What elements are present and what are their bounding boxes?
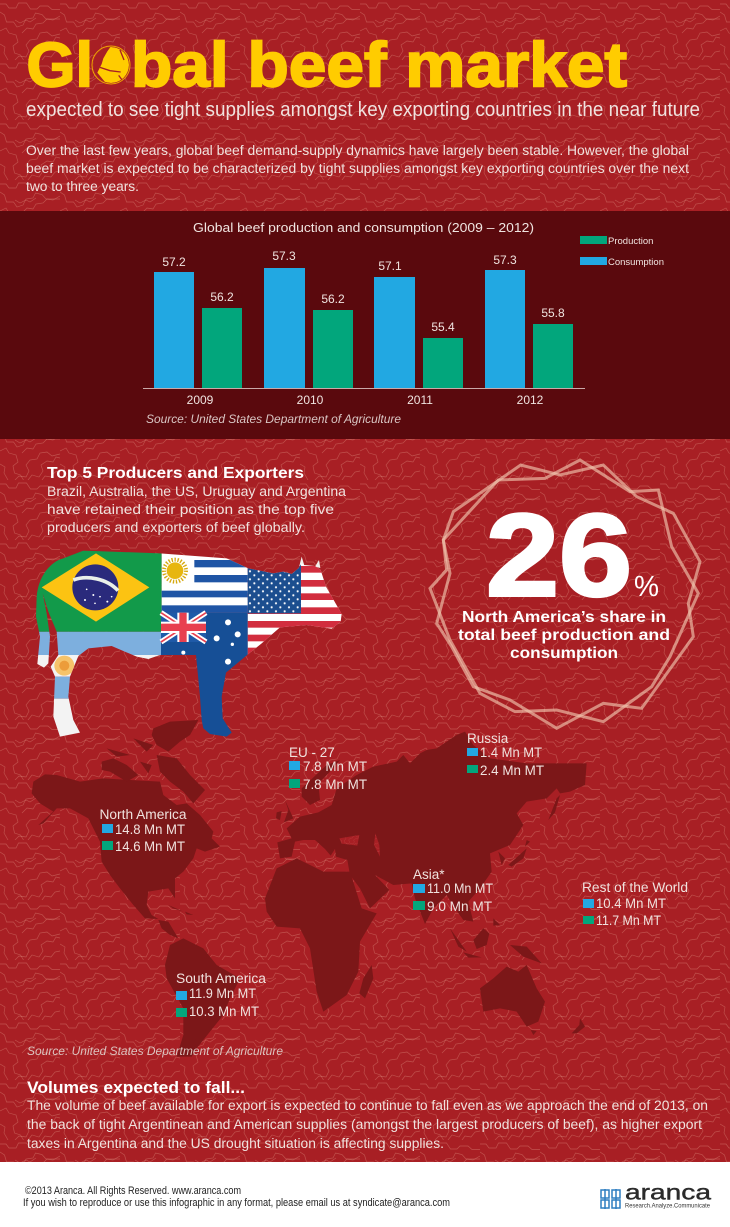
label: asia [413, 867, 493, 914]
flag: uruguay [162, 552, 249, 613]
legend: Consumption [608, 257, 664, 268]
bar chart: 55.4 [431, 320, 455, 334]
callout text: consumption [510, 645, 618, 662]
copyright text: If you wish to reproduce or use this infographic in any format, please email us at syndicate@aranca.com [23, 1197, 450, 1209]
panel: production and consumption chart [0, 211, 730, 439]
top 5 text block [47, 484, 346, 535]
percent sign: % [634, 571, 659, 603]
volumes text block: the back of tight Argentinean and American supplies (amongst the largest producers of beef), as higher export [27, 1117, 702, 1132]
top 5 text block: Brazil, Australia, the US, Uruguay and Argentina [47, 484, 346, 499]
title: bal beef market [131, 30, 627, 100]
label: russia: 2.4 Mn MT [480, 763, 544, 778]
bar chart: 2011 [407, 393, 433, 407]
intro paragraph [26, 143, 689, 194]
volumes heading: Volumes expected to fall... [27, 1079, 245, 1097]
bar chart: 2010 [297, 393, 324, 407]
top 5 heading: Top 5 Producers and Exporters [47, 465, 304, 482]
cow made of flags [33, 548, 348, 743]
bar chart: 2012 [517, 393, 544, 407]
label: russia: 1.4 Mn MT [480, 745, 542, 760]
map: americas [32, 720, 240, 1057]
label: north america: North America [100, 807, 187, 822]
label: north america: 14.8 Mn MT [115, 822, 185, 837]
bar chart: 57.1 [378, 259, 402, 273]
callout: 26 percent [430, 460, 700, 728]
label: russia: Russia [467, 731, 509, 746]
top 5 text block: producers and exporters of beef globally. [47, 520, 305, 535]
label: north america: 14.6 Mn MT [115, 839, 185, 854]
volumes text block [27, 1098, 708, 1151]
world map [32, 720, 587, 1057]
logo: aranca: aranca [625, 1182, 711, 1204]
map: inland seas [339, 833, 380, 857]
icon: logo mark [601, 1189, 620, 1209]
label: rest of the world: 11.7 Mn MT [596, 913, 661, 928]
chart title: Global beef production and consumption (2009 – 2012) [193, 220, 534, 235]
label: rest of the world: 10.4 Mn MT [596, 896, 666, 911]
legend [580, 236, 664, 268]
bar chart: 55.8 [541, 306, 565, 320]
intro paragraph: Over the last few years, global beef demand-supply dynamics have largely been stable. However, the global [26, 143, 689, 158]
top 5 text block: have retained their position as the top five [47, 502, 334, 517]
flag: australia [161, 613, 248, 743]
volumes text block: taxes in Argentina and the US drought situation is affecting supplies. [27, 1136, 444, 1151]
flag: brazil [33, 548, 162, 632]
copyright text: ©2013 Aranca. All Rights Reserved. www.aranca.com [25, 1185, 241, 1197]
callout text [458, 609, 670, 662]
label: rest of the world [582, 880, 688, 928]
bar chart: 57.3 [272, 249, 296, 263]
copyright text [23, 1185, 450, 1209]
intro paragraph: two to three years. [26, 179, 139, 194]
bar chart: 57.3 [493, 253, 517, 267]
callout text: total beef production and [458, 627, 670, 644]
bar chart: 56.2 [210, 290, 234, 304]
map labels [100, 731, 688, 1019]
flag: united states [248, 564, 342, 655]
map: europe, asia, africa, oceania [265, 732, 587, 1035]
legend: Production [608, 236, 653, 247]
icon: globe [92, 46, 130, 85]
bar chart [143, 249, 585, 407]
label: south america [176, 971, 267, 1019]
callout text: North America’s share in [462, 609, 666, 626]
subtitle: expected to see tight supplies amongst key exporting countries in the near future [26, 99, 700, 121]
label: asia: 9.0 Mn MT [427, 899, 492, 914]
intro paragraph: beef market is expected to be characterized by tight supplies amongst key exporting countries over the next [26, 161, 689, 176]
bar chart: 2009 [187, 393, 214, 407]
volumes text block: The volume of beef available for export is expected to continue to fall even as we approach the end of 2013, on [27, 1098, 708, 1113]
label: south america: South America [176, 971, 267, 986]
label: south america: 10.3 Mn MT [189, 1004, 259, 1019]
map source: Source: United States Department of Agriculture [27, 1046, 283, 1058]
bar chart: 56.2 [321, 292, 345, 306]
label: eu-27: 7.8 Mn MT [303, 777, 367, 792]
title: l [76, 30, 93, 100]
label: north america [100, 807, 187, 854]
label: asia: 11.0 Mn MT [427, 881, 493, 896]
title [28, 40, 628, 88]
logo: aranca [601, 1182, 711, 1210]
title: G [26, 30, 76, 100]
logo: aranca: Research.Analyze.Communicate [625, 1202, 710, 1210]
chart source: Source: United States Department of Agriculture [146, 414, 401, 426]
label: eu-27: 7.8 Mn MT [303, 759, 367, 774]
label: eu-27 [289, 745, 367, 792]
label: russia [467, 731, 544, 778]
flag: argentina [33, 632, 161, 742]
label: asia: Asia* [413, 867, 445, 882]
bar chart: 57.2 [162, 255, 186, 269]
label: eu-27: EU - 27 [289, 745, 335, 760]
decorative star outline [430, 460, 700, 728]
big number: 26 [486, 490, 632, 620]
horns [299, 557, 320, 568]
label: south america: 11.9 Mn MT [189, 986, 256, 1001]
footer panel [0, 1162, 730, 1227]
label: rest of the world: Rest of the World [582, 880, 688, 895]
